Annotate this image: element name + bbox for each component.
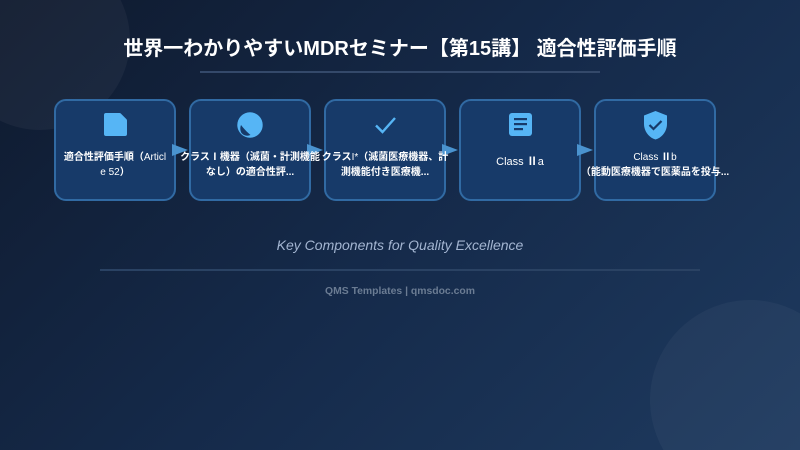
arrow 2 — [307, 144, 323, 156]
title: 世界一わかりやすいMDRセミナー【第15講】 適合性評価手順 — [123, 38, 677, 60]
step 5 label — [581, 152, 729, 178]
step 3 label: クラスI*（滅菌医療機器、計 — [322, 152, 448, 163]
step 2 label — [180, 151, 320, 178]
step 2 label: なし）の適合性評... — [206, 167, 294, 178]
panel: step 3 — [324, 99, 446, 201]
arrow 1 — [172, 144, 188, 156]
decorative circle: bottom right — [650, 300, 800, 450]
subtitle: Key Components for Quality Excellence — [277, 237, 523, 253]
icon: article — [509, 113, 532, 136]
step 2 label: クラスⅠ機器（滅菌・計測機能 — [180, 152, 320, 163]
icon: check mark — [375, 117, 396, 134]
arrow 3 — [442, 144, 458, 156]
icon: document — [104, 113, 127, 136]
step 1 label: 適合性評価手順（Articl — [64, 152, 166, 163]
icon: verified shield — [644, 111, 667, 140]
step 1 label: e 52） — [100, 167, 130, 178]
step 5 label: （能動医療機器で医薬品を投与... — [581, 167, 729, 178]
step 4 label: Class Ⅱa — [496, 156, 544, 168]
footer: QMS Templates | qmsdoc.com — [325, 286, 475, 297]
panel: step 1 — [54, 99, 176, 201]
step 3 label — [322, 151, 448, 178]
step 3 label: 測機能付き医療機... — [341, 167, 429, 178]
step 1 label — [64, 151, 166, 178]
panel: step 2 — [189, 99, 311, 201]
step 5 label: Class Ⅱb — [633, 152, 677, 163]
icon: circle with leaf — [237, 112, 263, 138]
panel: step 5 — [594, 99, 716, 201]
arrow 4 — [577, 144, 593, 156]
panel: step 4 — [459, 99, 581, 201]
decorative circle: top left — [0, 0, 130, 130]
